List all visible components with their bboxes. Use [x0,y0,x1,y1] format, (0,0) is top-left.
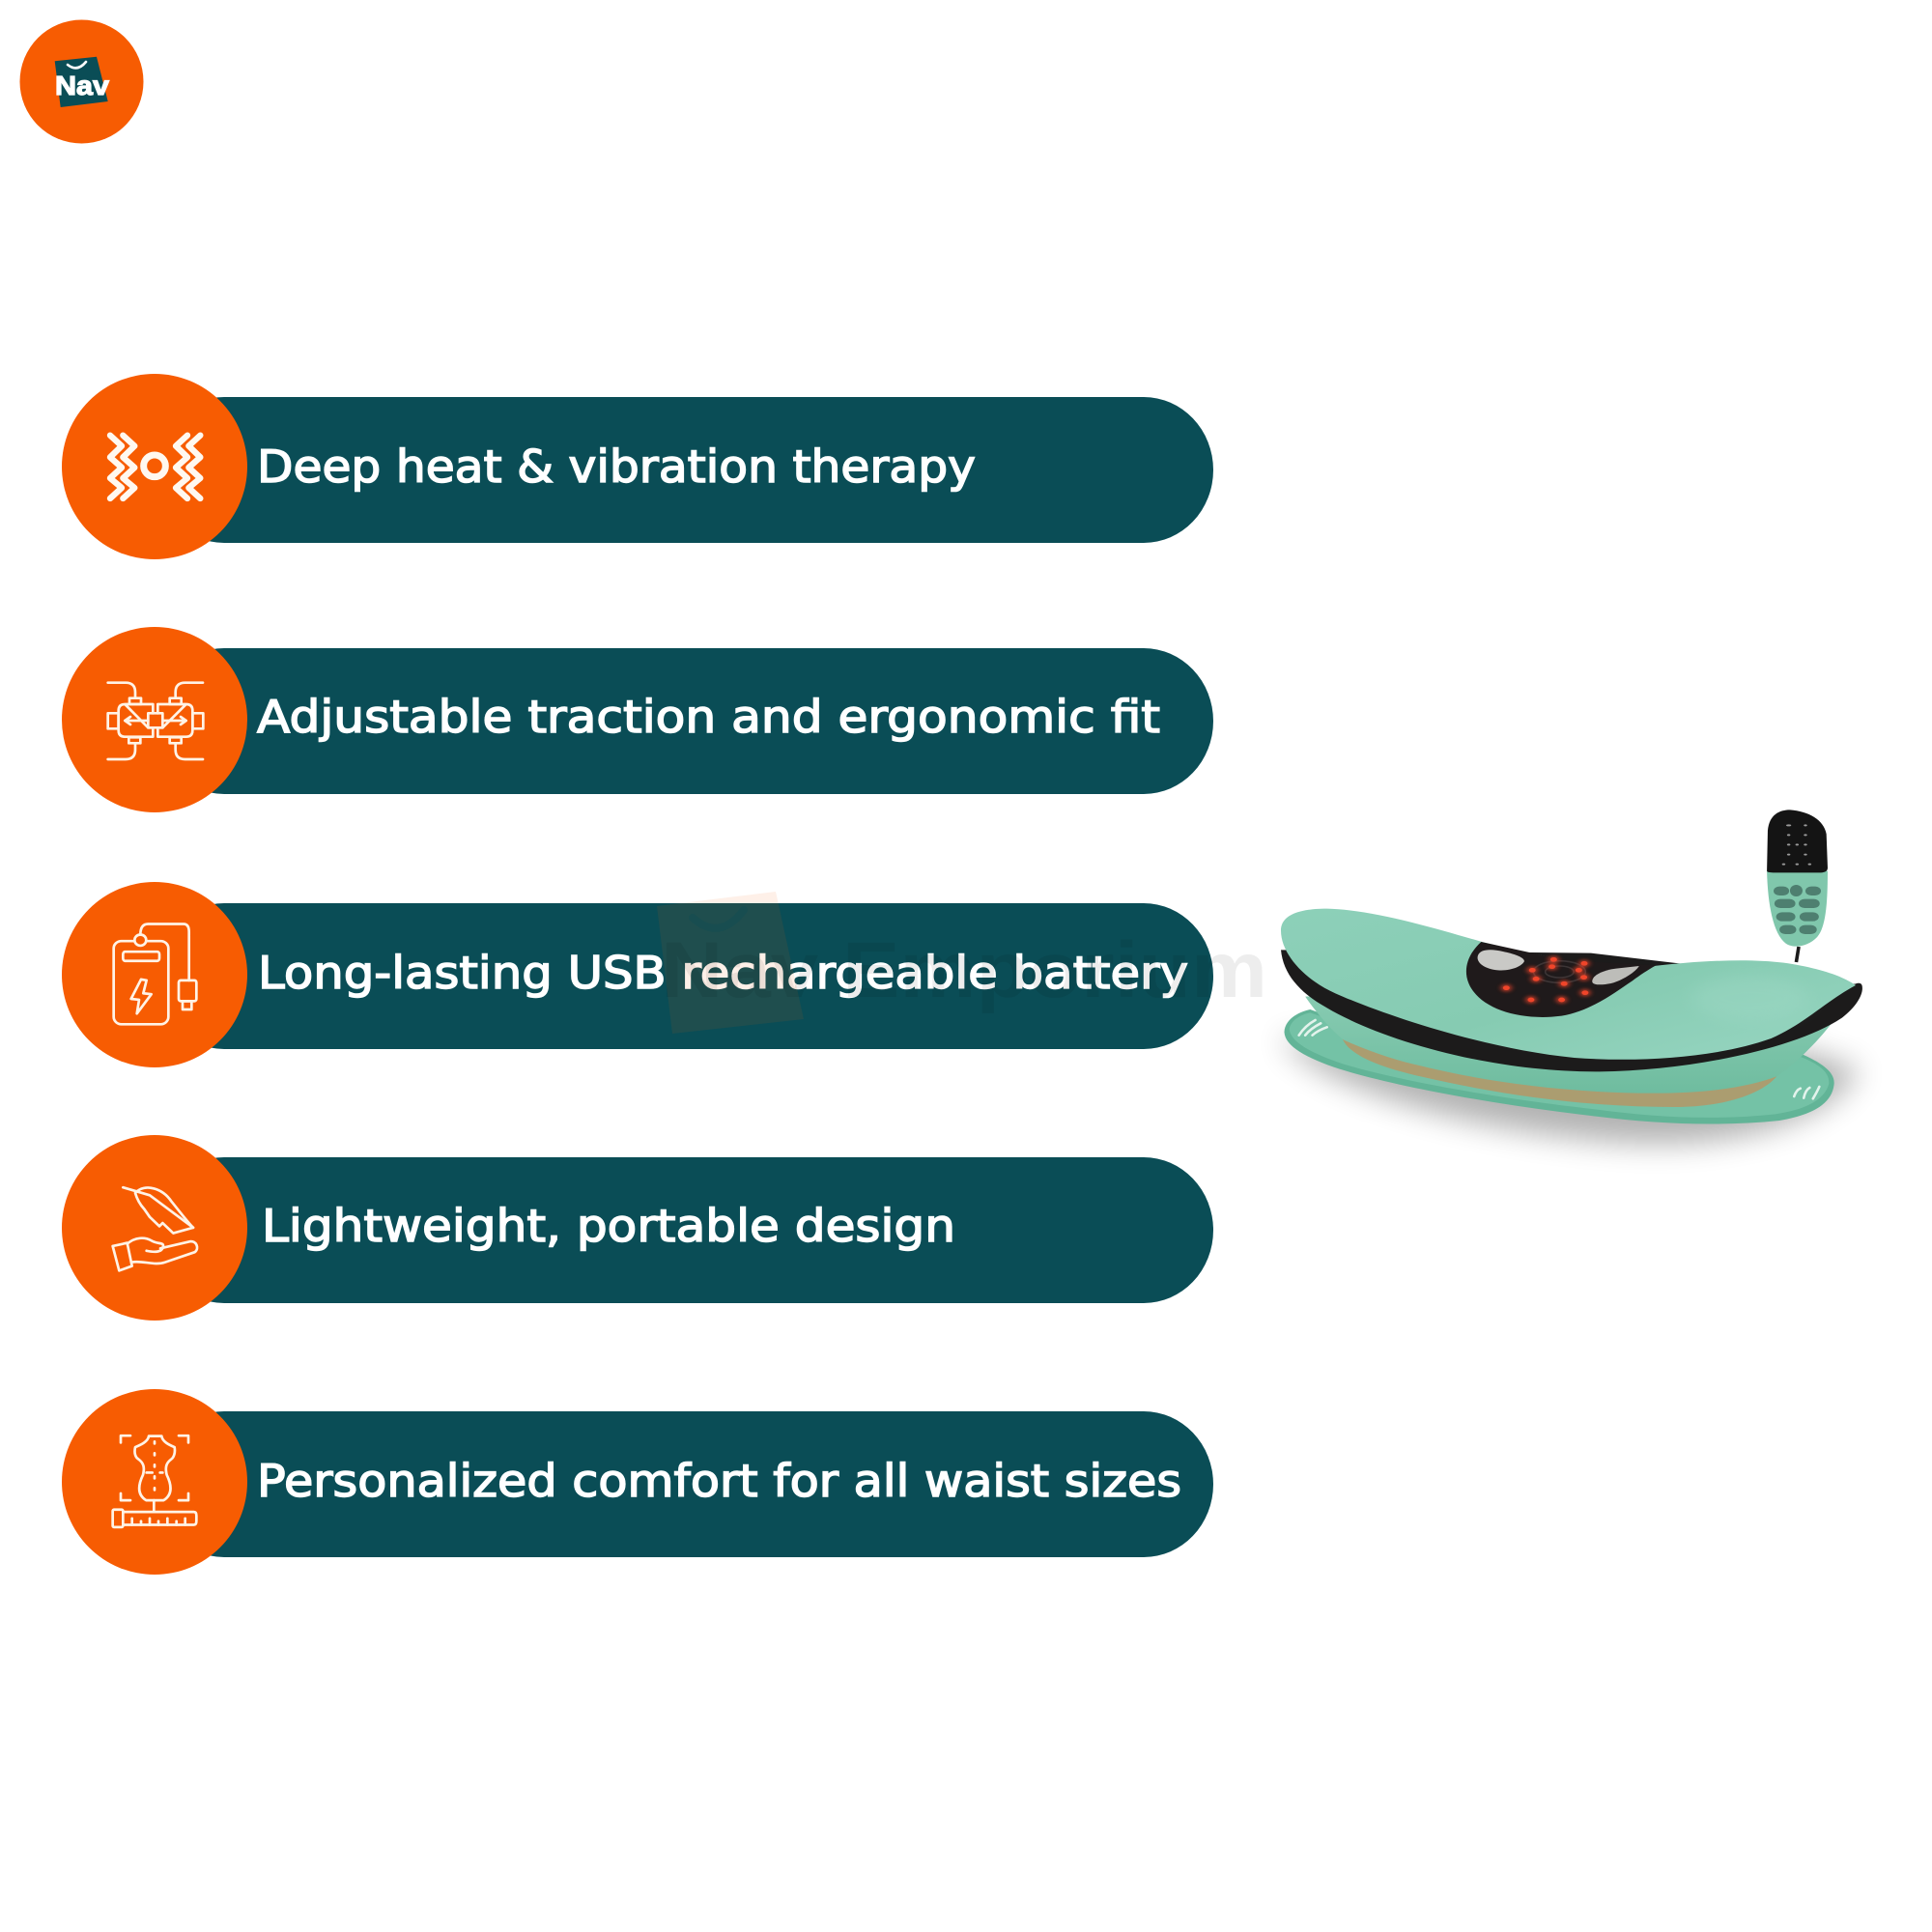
lower body [1305,985,1833,1094]
panel rings [1534,961,1585,982]
bar [155,1157,1213,1303]
control panel [1466,942,1656,1017]
icon: waist measurement dress form [113,1435,196,1527]
icon: feather over hand [113,1187,197,1270]
surface highlight [1691,976,1808,1021]
remote screen marks [1782,824,1811,866]
watermark bag [657,892,804,1034]
cork base [1342,1037,1777,1107]
watermark text: Nav Emporium [661,926,1267,1014]
circle [62,627,247,812]
remote top [1767,810,1828,872]
text: Lightweight, portable design [262,1200,955,1252]
tray vents [1299,1020,1819,1098]
logo bag [55,57,108,107]
shadow [1281,1037,1859,1144]
text: Adjustable traction and ergonomic fit [257,691,1160,743]
bar [155,903,1213,1049]
top surface [1281,909,1856,1060]
circle [62,1135,247,1321]
feature row 4 [62,1135,1213,1321]
feature row 5 [62,1389,1213,1575]
black band [1281,950,1862,1071]
icon: heat and vibration waves [110,436,200,498]
bar [155,1411,1213,1557]
text: Long-lasting USB rechargeable battery [258,947,1188,999]
feature row 2 [62,627,1213,812]
logo wordmark: Nav [55,71,109,100]
icon: USB rechargeable battery [114,923,196,1024]
watermark smile [693,910,744,928]
circle [62,374,247,559]
feature row 3 [62,882,1213,1067]
bar [155,648,1213,794]
remote lower [1767,871,1828,947]
text: Deep heat & vibration therapy [257,440,976,493]
tray inner surface [1290,1012,1829,1118]
tray [1284,1009,1834,1124]
feature row 1 [62,374,1213,559]
text: Personalized comfort for all waist sizes [257,1455,1181,1507]
remote cable [1796,947,1799,962]
icon: adjustable traction [108,683,203,759]
watermark [657,892,1267,1034]
circle [62,882,247,1067]
product: lumbar massager with remote [1281,810,1862,1144]
circle [62,1389,247,1575]
logo smile [68,62,86,68]
bar [155,397,1213,543]
silver pads [1478,950,1524,970]
red heat lights [1501,955,1591,1004]
logo badge [19,19,143,143]
remote buttons [1774,885,1821,934]
